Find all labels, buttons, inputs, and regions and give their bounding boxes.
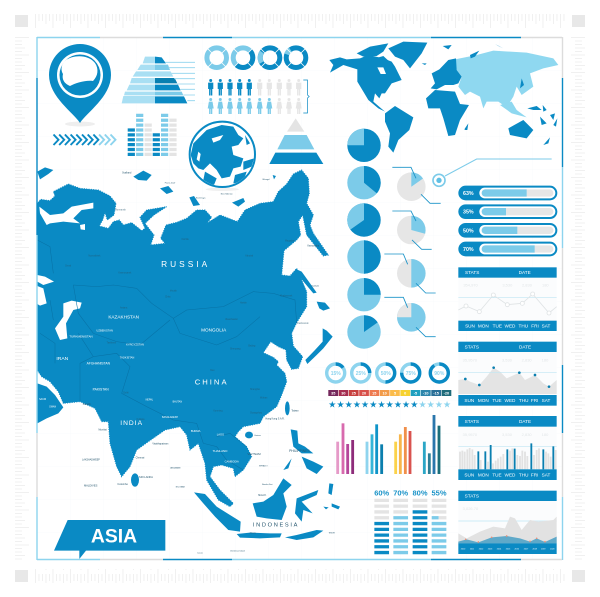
indonesia and philippines labels: INDONESIA [253, 523, 299, 529]
stats panel 3 bar chart: 180 [542, 432, 549, 437]
white country labels: NEPAL [146, 399, 154, 402]
star rating row: ★ [386, 400, 394, 410]
stats panel 1 line chart: THU [519, 324, 528, 329]
stats panel 1 line chart: SAT [542, 324, 551, 329]
percentage donut row: 50% [381, 371, 391, 377]
dark city labels: Shanghai [250, 389, 260, 391]
stats panel 3 bar chart: WED [505, 472, 516, 477]
star rating row: ★ [427, 400, 435, 410]
indonesia and philippines labels: Sakhalin [312, 286, 319, 288]
white country labels: KYRGYZSTAN [126, 342, 144, 346]
stats panel 2 area chart: SUN [464, 398, 474, 403]
south america [385, 106, 413, 153]
indonesia and philippines labels: Cocos [197, 552, 203, 554]
japan [317, 302, 330, 311]
indonesia and philippines labels: Chennai [136, 457, 145, 459]
stats panel 3 bar chart: THU [519, 472, 528, 477]
stats panel 1 line chart: 354,970 [463, 283, 479, 288]
stats panel 2 area chart: STATS [465, 344, 479, 349]
dark city labels: Vladivostok [297, 322, 309, 325]
indonesia and philippines labels: Hong Kong S.A.R. [265, 417, 285, 420]
asia title banner: ASIA [91, 527, 137, 548]
percentage donut row: 90% [434, 371, 445, 377]
percentage donut row: 15% [331, 371, 341, 377]
stacked pyramid chart [122, 57, 195, 103]
world map [329, 42, 558, 153]
white country labels: KAZAKHSTAN [108, 315, 139, 320]
stats panel 4 layered area chart: STATS [465, 494, 479, 499]
temperature scale: -20 [444, 392, 449, 396]
arabia [37, 383, 63, 423]
borneo [253, 478, 292, 520]
indonesia and philippines labels: New Siberian [221, 192, 233, 195]
dark city labels: Chita [165, 295, 171, 298]
stats panel 4 layered area chart: 2010 [461, 549, 466, 551]
temperature scale: -15 [433, 392, 439, 396]
chevron arrows [54, 134, 116, 145]
dark city labels: Yakutsk [245, 255, 254, 258]
people pictogram [208, 79, 309, 114]
dark city labels: Astana [120, 306, 128, 309]
indonesia and philippines labels: Svalbard [122, 171, 132, 174]
percentage donut row [327, 364, 448, 382]
stats panel 1 line chart: SUN [465, 324, 475, 329]
indonesia and philippines labels: Kamchatka [308, 245, 320, 248]
indonesia and philippines labels: Colombo [117, 482, 128, 486]
indonesia and philippines labels: PHILIPPINES [289, 449, 310, 453]
star rating row: ★ [369, 400, 377, 410]
star rating row: ★ [402, 400, 410, 410]
iceland, uk, islands [422, 44, 503, 65]
stats panel 3 bar chart: FRI [531, 472, 538, 477]
stats panel 1 line chart: DATE [519, 270, 531, 275]
stats panel 4 layered area chart: 2017 [524, 549, 528, 551]
white country labels: BANGLADESH [162, 416, 178, 419]
white country labels: LAOS [217, 433, 224, 437]
dark city labels [65, 209, 309, 421]
indonesia and philippines labels: SRI LANKA [139, 475, 153, 479]
asia title banner [54, 520, 165, 559]
dark city labels: Xian [210, 370, 215, 372]
star rating row: ★ [377, 400, 386, 410]
triangle pyramid icon [269, 118, 323, 164]
temperature scale: -10 [423, 392, 429, 396]
dark city labels: Harbin [240, 301, 248, 304]
indonesia and philippines labels: TIMOR [328, 532, 335, 534]
dark city labels: Beijing [248, 346, 256, 348]
percentage column bars: 80% [412, 488, 428, 498]
stats panel 4 layered area chart: 2013 [488, 549, 493, 551]
stats panel 1 line chart [458, 267, 557, 331]
progress bars: 35% [463, 210, 474, 216]
asia highlighted [455, 51, 558, 108]
stats panel 4 layered area chart: 2012 [479, 549, 483, 551]
dark city labels: Norilsk [182, 238, 190, 241]
white country labels: IRAQ [44, 379, 49, 382]
star rating row: ★ [410, 400, 418, 410]
star rating row: ★ [394, 400, 402, 410]
star rating row: ★ [443, 400, 451, 410]
indonesia and philippines labels: NICOBAR [176, 486, 185, 489]
stats panel 3 bar chart: TUE [492, 472, 502, 477]
stats panel 1 line chart: FRI [531, 324, 539, 329]
dark city labels: Omsk [65, 266, 72, 268]
stats panel 3 bar chart: STATS [465, 419, 479, 424]
indonesia and philippines labels: Visakhapatnam [152, 442, 168, 445]
dark city labels: Irkutsk [170, 290, 178, 293]
stats panel 4 layered area chart: 2016 [514, 549, 520, 551]
stats panel 3 bar chart: SAT [542, 472, 551, 477]
white country labels: RUSSIA [161, 259, 210, 269]
dark city labels: Magadan [285, 241, 295, 243]
stats panel 4 layered area chart: 2011 [470, 549, 474, 551]
indonesia and philippines labels: MALDIVES [84, 484, 98, 488]
east islands [323, 483, 340, 509]
white country labels: CHINA [195, 377, 229, 386]
temperature scale: 15 [372, 392, 376, 396]
star rating row: ★ [336, 400, 345, 410]
white country labels: IRAN [56, 356, 69, 362]
stats panel 4 layered area chart [458, 491, 557, 554]
stats panel 2 area chart: 180 [542, 357, 549, 362]
dark city labels: Kolkata [137, 418, 145, 421]
star rating row: ★ [418, 400, 427, 410]
stats panel 4 layered area chart: 2014 [497, 549, 502, 551]
stats panel 4 layered area chart: 2020 [550, 549, 555, 551]
europe [431, 58, 462, 89]
dark city labels: Novosibirsk [88, 255, 101, 258]
canadian arctic [357, 43, 388, 63]
percentage column bars: 60% [374, 488, 390, 498]
temperature scale: 10 [382, 392, 387, 396]
stats panel 1 line chart: 180 [542, 283, 549, 288]
sumatra [194, 492, 241, 532]
donut icons row [207, 44, 309, 72]
philippines [283, 429, 323, 474]
stats panel 3 bar chart [458, 416, 557, 480]
temperature scale: -5 [414, 392, 417, 396]
stats panel 3 bar chart: 3,530 [502, 432, 513, 437]
globe icon [190, 122, 255, 191]
stats panel 3 bar chart: 2,830 [522, 432, 532, 437]
dark city labels: Khabarovsk [280, 295, 293, 298]
percentage column bars: 70% [393, 488, 409, 498]
australia [508, 120, 533, 138]
white country labels: BHUTAN [173, 401, 182, 404]
sulawesi [295, 490, 318, 522]
taiwan [285, 401, 290, 415]
star rating row: ★ [361, 400, 369, 410]
white country labels: TAJIKISTAN [120, 355, 134, 359]
stats panel 1 line chart: STATS [465, 270, 479, 275]
equalizer chart [131, 112, 173, 156]
stats panel 4 layered area chart: 2018 [532, 549, 538, 551]
white country labels: TURKMENISTAN [69, 334, 93, 338]
stats panel 2 area chart: WED [505, 398, 516, 403]
white country labels: THAILAND [213, 449, 228, 453]
asia map [37, 167, 340, 554]
dark city labels: Delhi [123, 392, 129, 394]
star rating row: ★ [435, 400, 443, 410]
stats panel 2 area chart: MON [478, 398, 489, 403]
dark city labels: Kunming [213, 411, 223, 413]
stats panel 2 area chart: FRI [531, 398, 538, 403]
inner coloured frame [37, 37, 562, 560]
indonesia and philippines labels: Jakarta [249, 531, 257, 534]
stats panel 3 bar chart: DATE [519, 419, 531, 424]
temperature scale: 35 [331, 392, 335, 396]
white country labels: BURMA [191, 429, 201, 433]
white country labels: CAMBODIA [225, 460, 239, 464]
stats panel 3 bar chart: SUN [464, 472, 474, 477]
dark city labels: Shenyang [230, 348, 241, 350]
star rating row: ★ [353, 400, 361, 410]
stats panel 1 line chart: 2,830 [522, 283, 533, 288]
dark city labels: Ulaanbaatar [225, 318, 238, 321]
indonesia and philippines labels [82, 171, 335, 554]
java and sunda islands [237, 530, 323, 540]
indonesia and philippines labels: Wrangel [262, 178, 270, 181]
white country labels: MONGOLIA [201, 328, 227, 333]
white country labels: UZBEKISTAN [96, 329, 113, 333]
indonesia and philippines labels: Hainan [255, 435, 261, 437]
stats panel 2 area chart: 3,530 [502, 357, 513, 362]
colored bar chart [338, 415, 439, 474]
progress bars: 70% [463, 247, 474, 253]
indonesia and philippines labels: Taiwan [291, 411, 299, 413]
stats panel 1 line chart: MON [478, 324, 489, 329]
stats panel 2 area chart: THU [519, 398, 528, 403]
dark city labels: Wuhan [260, 397, 268, 399]
stats panel 1 line chart: TUE [493, 324, 502, 329]
white country labels: SAUDI [39, 398, 47, 401]
progress bars: 50% [463, 228, 474, 234]
indonesia and philippines labels: SPRATLY [259, 465, 268, 468]
indonesia and philippines labels: ANDAMAN [170, 466, 181, 469]
percentage column bars [374, 488, 447, 557]
white country labels: VIETNAM [247, 452, 261, 456]
white country labels [39, 259, 261, 464]
stats panel 4 layered area chart: 3,026.70 [463, 506, 479, 511]
mainland asia [37, 170, 328, 507]
stats panel 2 area chart: 2,830 [522, 357, 532, 362]
white country labels: AFGHANISTAN [87, 362, 111, 366]
indonesia and philippines labels: LAKSHADWEEP [82, 459, 100, 462]
temperature scale [328, 390, 451, 396]
stats panel 1 line chart: 3,530 [502, 283, 513, 288]
white country labels: INDIA [120, 420, 143, 427]
pie charts right column with leaders [384, 167, 441, 337]
stats panel 2 area chart [458, 342, 557, 406]
indonesia and philippines labels: Karachi [83, 403, 91, 406]
map pin icon [49, 44, 111, 126]
temperature scale: 25 [352, 392, 356, 396]
temperature scale: 30 [341, 392, 346, 396]
stats panel 1 line chart: WED [505, 324, 516, 329]
indonesia and philippines labels: MALAY. [258, 494, 267, 497]
temperature scale: 5 [394, 392, 396, 396]
dark city labels: Murmansk [115, 209, 127, 212]
indonesia and philippines labels: Franz Josef [165, 181, 176, 184]
stats panel 4 layered area chart: 2019 [541, 549, 546, 551]
dark city labels: Tashkent [107, 341, 116, 344]
stats panel 2 area chart: 35,9570 [463, 357, 478, 362]
stats panel 4 layered area chart: 2015 [506, 549, 511, 551]
stats panel 3 bar chart: 35,9570 [463, 432, 478, 437]
hainan [245, 432, 253, 438]
stats panel 3 bar chart: MON [478, 472, 489, 477]
indonesia and philippines labels: Severnaya [196, 197, 206, 200]
pacific islands [527, 105, 557, 127]
percentage column bars: 55% [431, 488, 447, 498]
temperature scale: 0 [404, 392, 406, 396]
indonesia and philippines labels: Mumbai [99, 430, 107, 432]
target callout [433, 159, 552, 186]
progress bars [458, 186, 557, 256]
stats panel 2 area chart: SAT [542, 398, 551, 403]
dark city labels: Krasnoyarsk [118, 271, 132, 274]
white country labels: PAKISTAN [93, 388, 109, 392]
stats panel 2 area chart: DATE [519, 344, 531, 349]
indonesia and philippines labels: Christmas Island [230, 550, 245, 553]
percentage donut row: 75% [406, 371, 416, 377]
sakhalin strip [297, 269, 317, 293]
arctic islands [37, 167, 53, 179]
progress bars: 63% [463, 191, 474, 197]
greenland [388, 42, 427, 68]
percentage donut row: 25% [356, 371, 366, 377]
inland seas [37, 203, 93, 340]
country borders [37, 240, 297, 470]
indonesia and philippines labels: Bandar Seri [262, 483, 273, 486]
stats panel 2 area chart: TUE [492, 398, 502, 403]
star rating row [328, 400, 451, 410]
white country labels: OMAN [49, 405, 56, 408]
sri lanka [131, 473, 139, 487]
dark city labels: Guangzhou [250, 412, 263, 414]
north america [329, 55, 402, 112]
star rating row: ★ [345, 400, 353, 410]
map grid background [37, 37, 563, 560]
pie charts left column [347, 129, 381, 349]
star rating row: ★ [328, 400, 336, 410]
africa [426, 90, 469, 136]
temperature scale: 20 [362, 392, 366, 396]
